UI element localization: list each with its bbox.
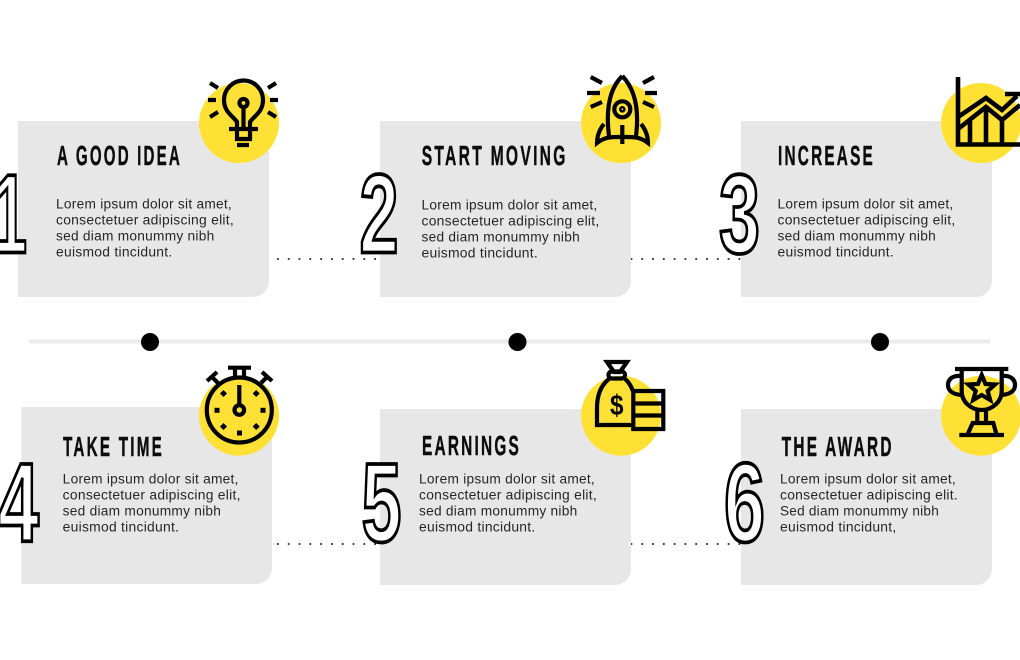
panel: a good idea [0, 80, 279, 297]
timeline dot 3 [871, 333, 889, 351]
dotted connector 1 to 2 [277, 258, 381, 260]
body text [422, 198, 600, 260]
icon: money bag and coins [597, 362, 663, 429]
icon: stopwatch [207, 368, 272, 442]
heading: START MOVING [422, 140, 568, 171]
body text: Lorem ipsum dolor sit amet, [419, 472, 595, 486]
dollar sign: $ [610, 390, 624, 422]
panel: the award [724, 369, 1020, 585]
timeline dot 2 [508, 333, 526, 351]
icon: rocket [587, 76, 657, 144]
icon: light bulb [208, 80, 278, 145]
body text: consectetuer adipiscing elit, [56, 212, 234, 228]
panel: start moving [360, 76, 661, 297]
dotted connector 5 to 6 [630, 543, 742, 545]
body text: Sed diam monummy nibh [780, 504, 939, 518]
body text [63, 472, 241, 534]
body text [56, 196, 234, 260]
body text: Lorem ipsum dolor sit amet, [778, 196, 954, 212]
stopwatch ticks [214, 390, 266, 436]
panel: earnings [362, 362, 663, 585]
body text: Lorem ipsum dolor sit amet, [56, 196, 232, 212]
body text: sed diam monummy nibh [419, 504, 578, 518]
number 3: 3 [719, 152, 760, 276]
dotted connector 2 to 3 [630, 258, 742, 260]
body text: consectetuer adipiscing elit, [778, 212, 956, 228]
body text: consectetuer adipiscing elit, [419, 488, 597, 502]
body text: consectetuer adipiscing elit, [422, 214, 600, 228]
number 6: 6 [724, 440, 765, 566]
body text: Lorem ipsum dolor sit amet, [63, 472, 239, 486]
dotted connector 4 to 5 [277, 543, 381, 545]
body text [780, 472, 958, 534]
body text [778, 196, 956, 260]
body text: euismod tincidunt. [422, 246, 538, 260]
panel: take time [0, 368, 279, 584]
heading: THE AWARD [782, 431, 894, 462]
body text: euismod tincidunt. [778, 244, 894, 260]
icon: growth chart [958, 77, 1020, 144]
number 2: 2 [360, 152, 398, 276]
body text: Lorem ipsum dolor sit amet, [780, 472, 956, 486]
number 5: 5 [362, 440, 402, 566]
icon: trophy [948, 369, 1015, 435]
body text: consectetuer adipiscing elit, [63, 488, 241, 502]
body text: sed diam monummy nibh [63, 504, 221, 518]
heading: EARNINGS [422, 430, 521, 461]
panel: increase [719, 77, 1020, 297]
heading: INCREASE [778, 140, 875, 171]
timeline dot 1 [141, 333, 159, 351]
body text: euismod tincidunt, [780, 520, 896, 534]
heading: A GOOD IDEA [57, 140, 182, 171]
body text: sed diam monummy nibh [56, 228, 214, 244]
heading: TAKE TIME [63, 431, 164, 462]
body text: sed diam monummy nibh [422, 230, 580, 244]
body text: euismod tincidunt. [63, 520, 179, 534]
body text: sed diam monummy nibh [778, 228, 936, 244]
body text: consectetuer adipiscing elit. [780, 488, 958, 502]
body text: Lorem ipsum dolor sit amet, [422, 198, 598, 212]
body text: euismod tincidunt. [56, 244, 172, 260]
body text [419, 472, 597, 534]
body text: euismod tincidunt. [419, 520, 536, 534]
